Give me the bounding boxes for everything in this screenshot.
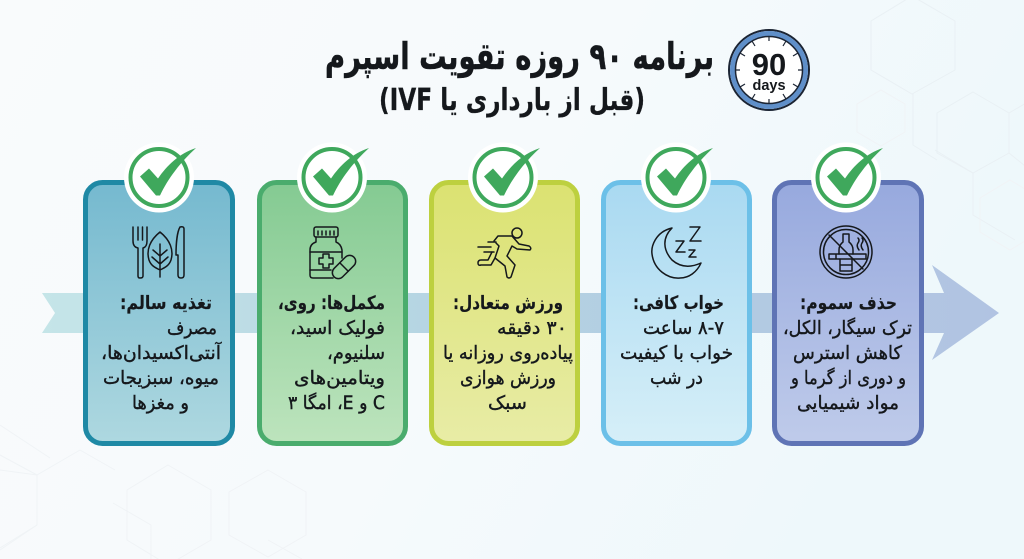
card text: healthy nutrition: و مغزها xyxy=(132,393,189,414)
arrow: progress band xyxy=(42,265,999,360)
card text: remove toxins: حذف سموم: xyxy=(800,293,897,314)
card text: enough sleep: خواب کافی: xyxy=(633,293,724,314)
check badge xyxy=(124,142,196,212)
icon: fork, leaf and knife xyxy=(133,227,184,278)
check badge xyxy=(641,142,713,212)
card: moderate exercise xyxy=(432,142,578,444)
title xyxy=(325,35,714,118)
icon: 90 days stopwatch xyxy=(729,30,809,110)
card text: moderate exercise xyxy=(443,293,573,414)
card text: healthy nutrition: مصرف xyxy=(167,318,217,339)
icon: 90 days stopwatch: days xyxy=(752,78,786,94)
card text: supplements: سلنیوم، xyxy=(327,343,385,364)
check badge xyxy=(468,142,540,212)
card text: enough sleep: خواب با کیفیت xyxy=(620,343,733,364)
card text: enough sleep: در شب xyxy=(650,368,703,389)
card text: supplements: مکمل‌ها: روی، xyxy=(278,293,385,314)
card text: supplements: ویتامین‌های xyxy=(294,368,385,389)
card text: moderate exercise: پیاده‌روی روزانه یا xyxy=(443,343,573,364)
title: برنامه ۹۰ روزه تقویت اسپرم xyxy=(325,35,714,79)
title: (قبل از بارداری یا IVF) xyxy=(379,83,645,118)
icon: crescent moon with z letters xyxy=(652,227,701,278)
card text: healthy nutrition: آنتی‌اکسیدان‌ها، xyxy=(101,341,222,364)
icon: no smoking and no alcohol xyxy=(820,226,872,278)
card: healthy nutrition xyxy=(86,142,232,444)
check badge xyxy=(811,142,883,212)
card text: moderate exercise: ورزش متعادل: xyxy=(453,293,563,314)
card text: enough sleep xyxy=(620,293,733,389)
card text: supplements: C و E، امگا ۳ xyxy=(288,392,385,414)
card text: remove toxins: ترک سیگار، الکل، xyxy=(783,317,912,339)
card text: moderate exercise: ورزش هوازی xyxy=(460,368,556,389)
card text: moderate exercise: ۳۰ دقیقه xyxy=(497,318,567,339)
card: remove toxins xyxy=(774,142,922,444)
card text: healthy nutrition xyxy=(101,293,222,414)
card text: enough sleep: ۸-۷ ساعت xyxy=(643,318,724,339)
card text: remove toxins: مواد شیمیایی xyxy=(797,393,899,414)
card text: healthy nutrition: میوه، سبزیجات xyxy=(103,368,219,389)
icon: supplement bottle and capsule xyxy=(310,227,358,281)
card text: healthy nutrition: تغذیه سالم: xyxy=(120,293,212,314)
icon: 90 days stopwatch: 90 xyxy=(752,47,786,82)
card text: remove toxins xyxy=(783,293,912,414)
card text: moderate exercise: سبک xyxy=(488,393,527,414)
card text: supplements xyxy=(278,293,385,414)
check badge xyxy=(297,142,369,212)
card: supplements xyxy=(260,142,406,444)
card: enough sleep xyxy=(604,142,750,444)
card text: supplements: فولیک اسید، xyxy=(290,318,385,339)
card text: remove toxins: و دوری از گرما و xyxy=(790,367,906,389)
icon: running person xyxy=(478,228,531,278)
card text: remove toxins: کاهش استرس xyxy=(793,343,902,364)
